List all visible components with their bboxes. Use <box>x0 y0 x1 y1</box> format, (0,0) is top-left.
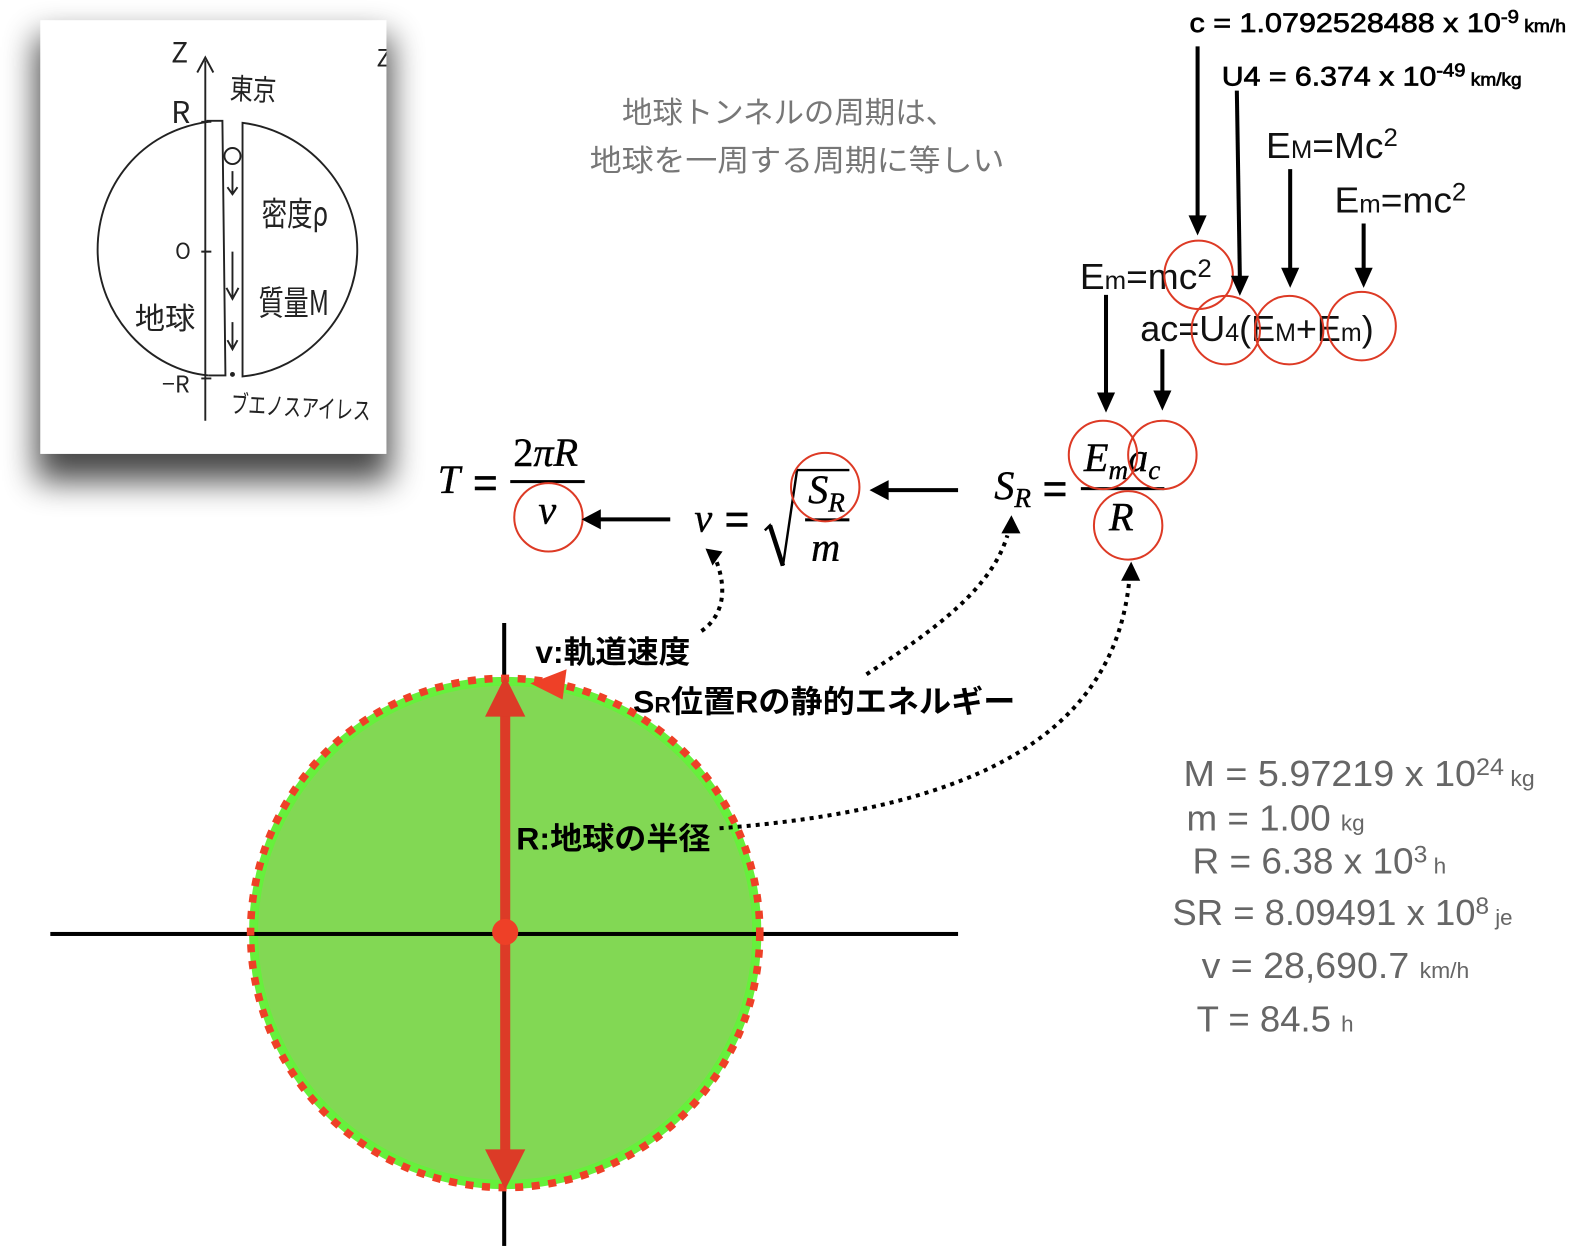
formula: period T <box>438 430 585 532</box>
sketch labels <box>135 30 391 428</box>
heading: tunnel period statement <box>590 96 1004 178</box>
value: R: R = 6.38 x 10 <box>1193 841 1409 882</box>
formula: Earth energy: 2 <box>1384 124 1398 152</box>
sketch labels: O <box>175 235 191 266</box>
formula: static energy SR: = <box>1043 465 1067 512</box>
sketch labels: −R <box>162 366 190 400</box>
sketch labels: 東京 <box>229 66 277 110</box>
arrows: constants into formulas <box>1097 46 1373 413</box>
formula: static energy SR: R <box>1013 483 1031 513</box>
sketch labels: Z <box>171 30 188 71</box>
constant: speed of light: -9 <box>1501 7 1519 27</box>
sketch: earth split by tunnel <box>98 57 357 421</box>
value: M: kg <box>1504 766 1535 791</box>
formula: period T: T <box>438 457 463 502</box>
value: R: h <box>1427 854 1446 879</box>
sketch labels: Z <box>376 38 391 73</box>
formula: velocity v: = <box>725 495 749 542</box>
value: R: 3 <box>1414 842 1427 869</box>
formula: static energy SR: c <box>1148 455 1160 485</box>
constant: U4: U4 = 6.374 x 10 <box>1222 61 1414 92</box>
orbit direction arrowhead <box>530 669 567 699</box>
label: static energy: SR位置Rの静的エネルギー <box>633 685 1015 720</box>
constant: U4: km/kg <box>1466 71 1522 90</box>
value: v: v = 28,690.7 km/h <box>1202 945 1469 986</box>
sketch labels: 密度ρ <box>262 186 328 235</box>
value: T: T = 84.5 h <box>1197 999 1354 1040</box>
formula: velocity v: S <box>808 467 828 512</box>
sketch labels: 質量M <box>259 275 329 325</box>
formula: static energy SR: R <box>1108 494 1134 539</box>
sketch labels: R <box>171 88 190 132</box>
value: m: m = 1.00 kg <box>1187 797 1365 838</box>
value: M: M = 5.97219 x 10 <box>1184 753 1464 794</box>
constant: speed of light: c = 1.0792528488 x 10 <box>1190 7 1467 38</box>
formula: mass energy upper: Em=mc <box>1334 179 1450 220</box>
constant: speed of light: km/h <box>1519 17 1566 36</box>
label: earth radius: R:地球の半径 <box>516 821 711 856</box>
formula: static energy SR: S <box>994 463 1014 508</box>
sketch labels: ブエノスアイレス <box>230 385 372 428</box>
formula: period T: 2πR <box>513 430 578 475</box>
highlight circles: upper formulas <box>1164 241 1396 364</box>
value: SR: 8 <box>1476 893 1489 920</box>
dotted arrow: radius label to R <box>720 562 1140 828</box>
values list <box>1172 753 1535 1040</box>
earth circle with axes <box>50 623 958 1246</box>
dotted arrow: velocity label to v <box>701 549 723 631</box>
formula: mass energy lower: 2 <box>1197 255 1212 283</box>
arrow: v into T <box>582 509 670 529</box>
highlight circle: SR <box>791 453 859 521</box>
formula: period T: v <box>538 487 556 532</box>
heading: tunnel period statement: 地球トンネルの周期は、 <box>622 96 956 130</box>
highlight circle: v <box>514 483 583 552</box>
formula: velocity v: v <box>694 495 712 540</box>
formula: velocity v <box>694 467 849 570</box>
formula: acceleration: ac=U4(EM+Em) <box>1140 308 1374 349</box>
value: SR: SR = 8.09491 x 10 <box>1172 892 1473 933</box>
formula: mass energy upper: 2 <box>1452 178 1466 206</box>
formula: static energy SR <box>994 435 1164 539</box>
value: M: 24 <box>1476 754 1504 781</box>
radius double arrow <box>485 676 525 1190</box>
label: orbital velocity: v:軌道速度 <box>535 635 690 670</box>
formula: velocity v: m <box>811 525 840 570</box>
panel: hand-drawn earth tunnel sketch <box>36 20 391 481</box>
center point <box>492 919 518 945</box>
arrow: SR into v <box>870 480 958 500</box>
sketch labels: 地球 <box>135 294 195 338</box>
dotted arrow: static energy label to SR <box>866 515 1020 674</box>
formula: Earth energy: EM=Mc <box>1266 125 1382 166</box>
formula: velocity v: R <box>827 487 845 517</box>
formula: static energy SR: a <box>1128 435 1148 480</box>
heading: tunnel period statement: 地球を一周する周期に等しい <box>590 144 1004 178</box>
formula: static energy SR: m <box>1108 455 1128 485</box>
value: SR: je <box>1489 905 1513 930</box>
formula: period T: = <box>473 459 498 506</box>
formula: static energy SR: E <box>1084 435 1108 480</box>
highlight circles: SR terms <box>1069 421 1197 560</box>
formula: mass energy lower: Em=mc <box>1080 256 1196 297</box>
constant: U4: -49 <box>1436 61 1466 81</box>
